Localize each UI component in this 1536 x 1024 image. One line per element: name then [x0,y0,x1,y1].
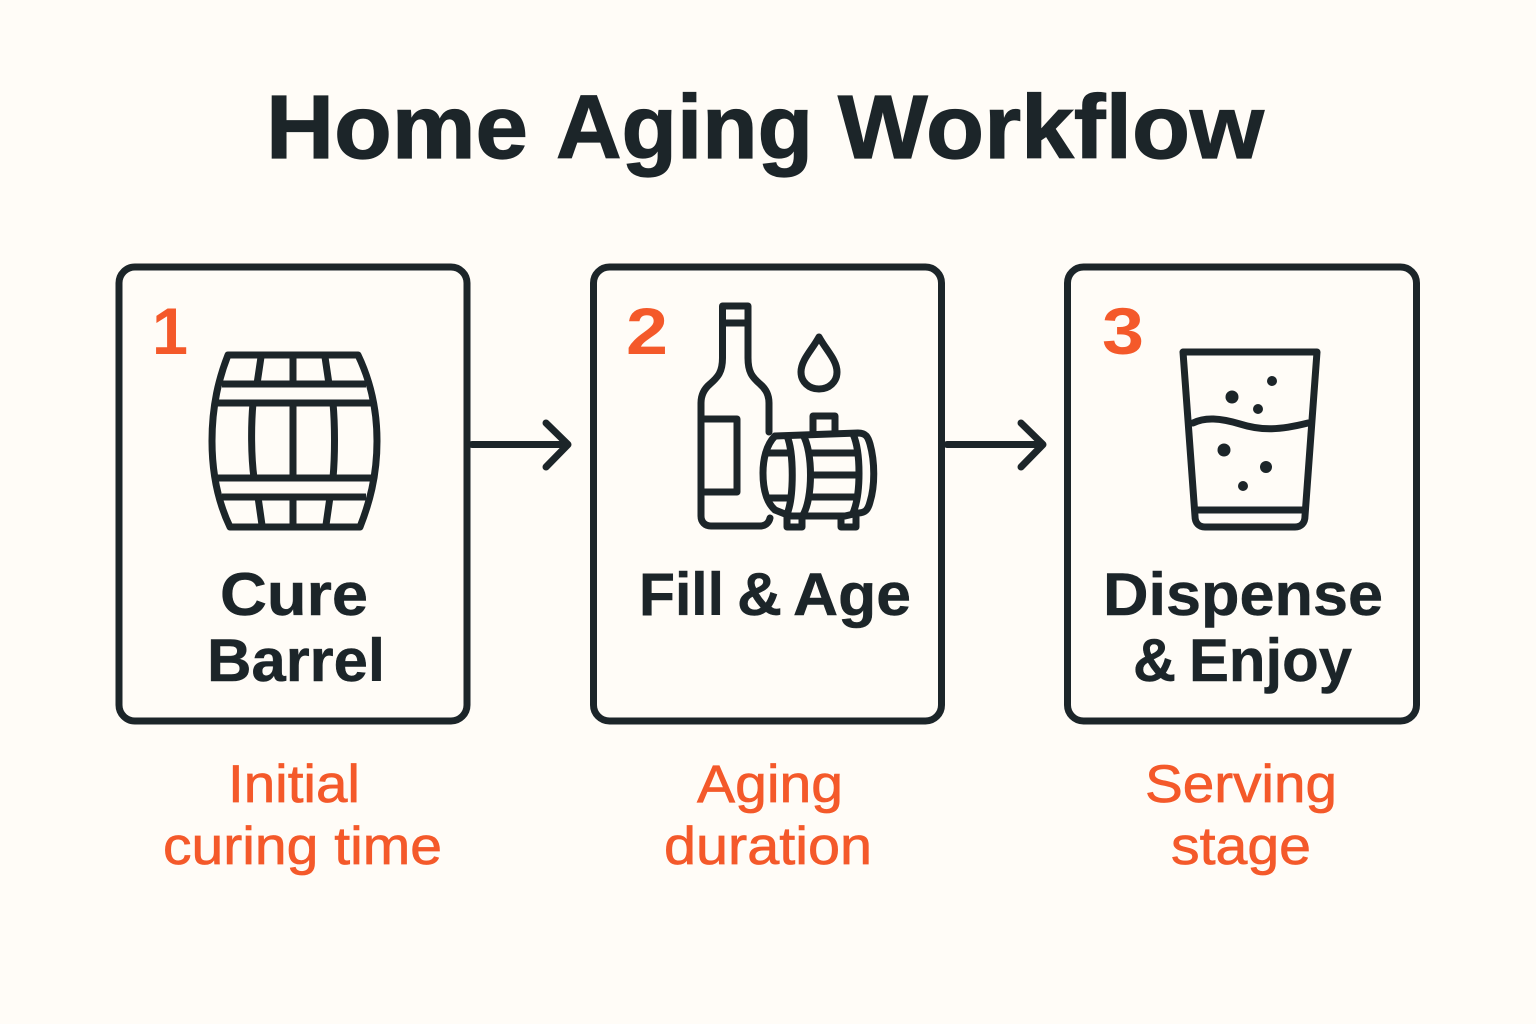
caption: serving stage: stage [1171,817,1311,876]
caption: serving stage [1145,755,1337,876]
icon: bottle, drop and small barrel [701,306,874,527]
step number 2: 2 [626,294,668,368]
label: Dispense & Enjoy: & [1133,627,1176,694]
caption: initial curing time: curing time [163,817,442,876]
title: Aging [556,78,813,178]
arrow: step 2 to 3 [947,423,1043,467]
caption: aging duration [664,755,872,876]
title: Workflow [838,78,1265,178]
icon: glass with bubbles [1183,352,1317,527]
step number 3: 3 [1102,294,1144,368]
label: Cure Barrel: Barrel [207,627,385,694]
icon: barrel [212,355,377,527]
caption: aging duration: duration [664,817,872,876]
panel frame 2 [594,267,942,721]
label: Dispense & Enjoy [1103,561,1383,694]
label: Dispense & Enjoy: Dispense [1103,561,1383,628]
caption: serving stage: Serving [1145,755,1337,814]
label: Fill & Age: Age [793,561,911,628]
panel: step 2 fill and age [594,267,942,721]
label: Fill & Age [639,561,911,628]
label: Fill & Age: Fill [639,561,724,628]
label: Fill & Age: & [737,561,782,628]
label: Cure Barrel: Cure [220,561,368,628]
step number 1: 1 [152,294,188,368]
title: Home [266,78,528,178]
caption: initial curing time: Initial [228,755,360,814]
caption: initial curing time [163,755,442,876]
panel frame 3 [1068,267,1416,721]
label: Cure Barrel [207,561,385,694]
arrow: step 1 to 2 [472,423,568,467]
title [266,78,1265,178]
panel: step 1 cure barrel [119,267,467,721]
panel frame 1 [119,267,467,721]
caption: aging duration: Aging [697,755,843,814]
label: Dispense & Enjoy: Enjoy [1189,627,1353,694]
panel: step 3 dispense and enjoy [1068,267,1416,721]
